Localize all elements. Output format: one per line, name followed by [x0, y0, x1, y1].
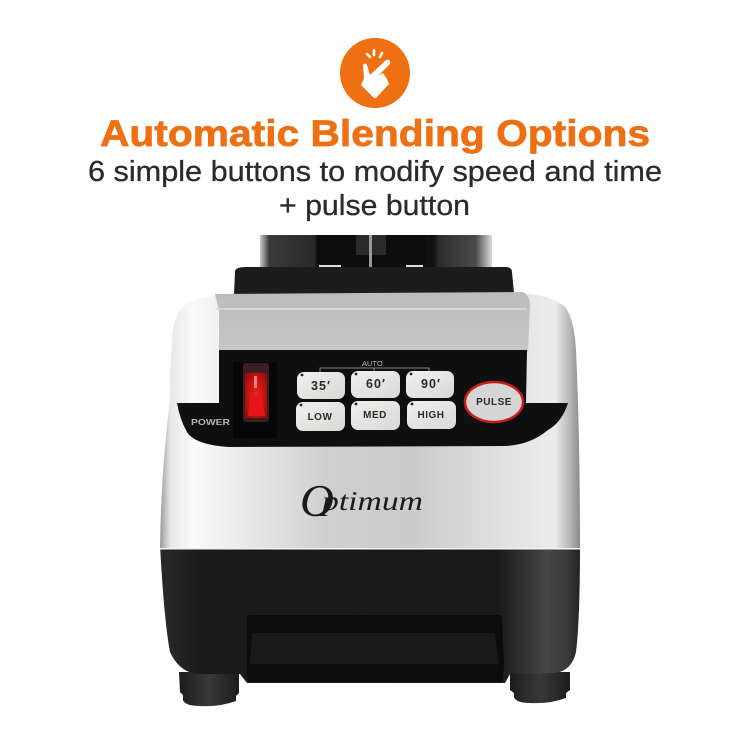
brand name: ptimum [320, 486, 423, 516]
base recess [247, 615, 504, 682]
power label: POWER [191, 417, 230, 427]
button indicator dots [300, 373, 413, 406]
collar [234, 267, 514, 295]
button labels: MED [363, 410, 387, 421]
subtitle [88, 156, 662, 222]
pulse button [465, 382, 523, 422]
auto label and bracket: AUTO [362, 359, 383, 368]
button labels: 60′ [366, 377, 386, 391]
control panel [177, 350, 568, 447]
auto label and bracket [320, 359, 429, 372]
button labels: LOW [308, 412, 332, 423]
brand name [300, 475, 423, 526]
button labels [308, 377, 444, 423]
blender [160, 235, 580, 706]
button labels: HIGH [418, 410, 444, 421]
preset buttons [296, 371, 456, 431]
black base [160, 545, 580, 683]
button labels: 90′ [421, 377, 441, 391]
subtitle: 6 simple buttons to modify speed and time [88, 156, 662, 188]
silver body [160, 293, 580, 550]
icon: hand tapping in orange circle [340, 38, 410, 108]
power switch [233, 362, 277, 438]
pulse button: PULSE [476, 397, 512, 408]
feet [179, 672, 570, 706]
subtitle: + pulse button [279, 190, 470, 222]
button labels: 35′ [311, 379, 331, 393]
brand name: O [300, 475, 334, 526]
title: Automatic Blending Options [100, 113, 650, 154]
blender jar [260, 235, 492, 269]
top silver panel [215, 292, 530, 352]
